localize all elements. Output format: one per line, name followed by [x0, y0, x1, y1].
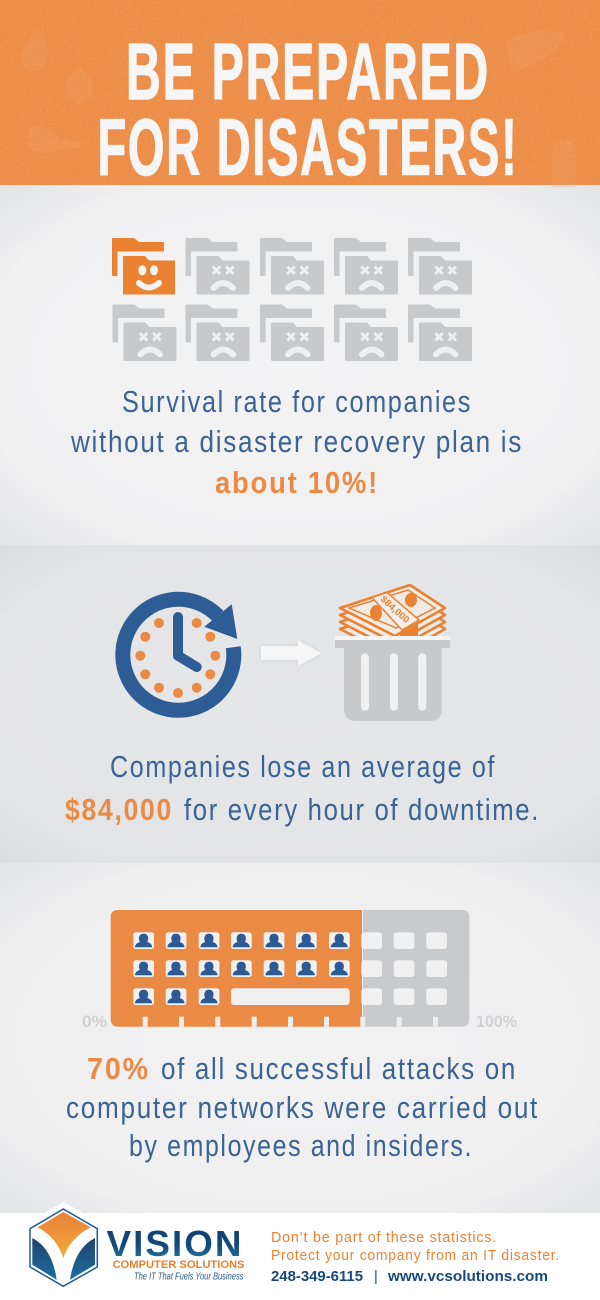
text block: footer contact details: 248-349-6115	[271, 1269, 363, 1285]
panel: footer	[0, 1213, 600, 1300]
panel: header banner	[0, 0, 600, 188]
logo text: company name: VISION	[106, 1223, 244, 1264]
faint disaster doodles	[21, 28, 576, 188]
logo text: company name: The IT That Fuels Your Business	[134, 1271, 244, 1283]
text block: downtime cost: Companies lose an average of	[110, 749, 496, 784]
panel: downtime cost background	[0, 545, 600, 863]
text block: insider attacks: of all successful attacks on	[161, 1051, 517, 1086]
arrow	[261, 640, 322, 666]
panel: insider attacks background	[0, 863, 600, 1213]
text block: downtime cost: $84,000	[65, 792, 173, 827]
icon: clock with circular arrow	[123, 599, 237, 710]
hour dots	[135, 618, 220, 698]
logo text: company name: COMPUTER SOLUTIONS	[112, 1259, 244, 1271]
text block: insider attacks: by employees and insiders.	[129, 1128, 473, 1163]
text block: footer call to action: Don’t be part of these statistics.	[271, 1230, 497, 1246]
text block: footer contact details	[271, 1269, 548, 1285]
title	[98, 27, 518, 191]
chart: keyboard progress bar 70%	[111, 910, 469, 1027]
arrow head	[204, 604, 237, 639]
text block: survival rate: Survival rate for companies	[122, 384, 472, 419]
text block: insider attacks: 70%	[87, 1051, 150, 1086]
text block: survival rate	[70, 384, 523, 500]
banknote label: $84,000	[378, 594, 411, 626]
text block: insider attacks	[66, 1051, 539, 1163]
trash can lid	[335, 636, 450, 640]
icon grid: ten folders, one happy	[112, 238, 472, 361]
text block: footer contact details: |	[374, 1269, 378, 1285]
axis label: 0%: 0%	[82, 1012, 107, 1031]
logo text: company name	[106, 1223, 244, 1283]
icon: money in trash can	[335, 585, 450, 721]
band tail	[400, 624, 418, 636]
trash can body	[344, 648, 442, 721]
keys with employee icons	[133, 932, 350, 1005]
icon: happy orange folder	[112, 238, 175, 294]
trash can slots	[361, 653, 426, 711]
text block: survival rate: about 10%!	[215, 465, 379, 500]
clock ring	[123, 599, 234, 710]
text block: downtime cost	[65, 749, 540, 827]
blank keys	[231, 932, 447, 1005]
text block: footer call to action	[271, 1230, 560, 1264]
text block: footer contact details: www.vcsolutions.com	[387, 1269, 548, 1285]
orange 70% portion	[111, 910, 362, 1027]
gray remainder	[363, 910, 469, 1027]
icons: sad gray folders	[112, 238, 472, 361]
logo: Vision hexagon	[24, 1202, 103, 1293]
bill inner detail	[349, 590, 435, 628]
text block: footer call to action: Protect your company from an IT disaster.	[271, 1248, 560, 1264]
text block: survival rate: without a disaster recovery plan is	[70, 424, 523, 459]
paper band	[372, 592, 419, 630]
clock hands	[178, 617, 197, 667]
scale ticks	[143, 1017, 438, 1027]
axis label: 100%: 100%	[476, 1012, 517, 1031]
panel: survival rate background	[0, 185, 600, 545]
